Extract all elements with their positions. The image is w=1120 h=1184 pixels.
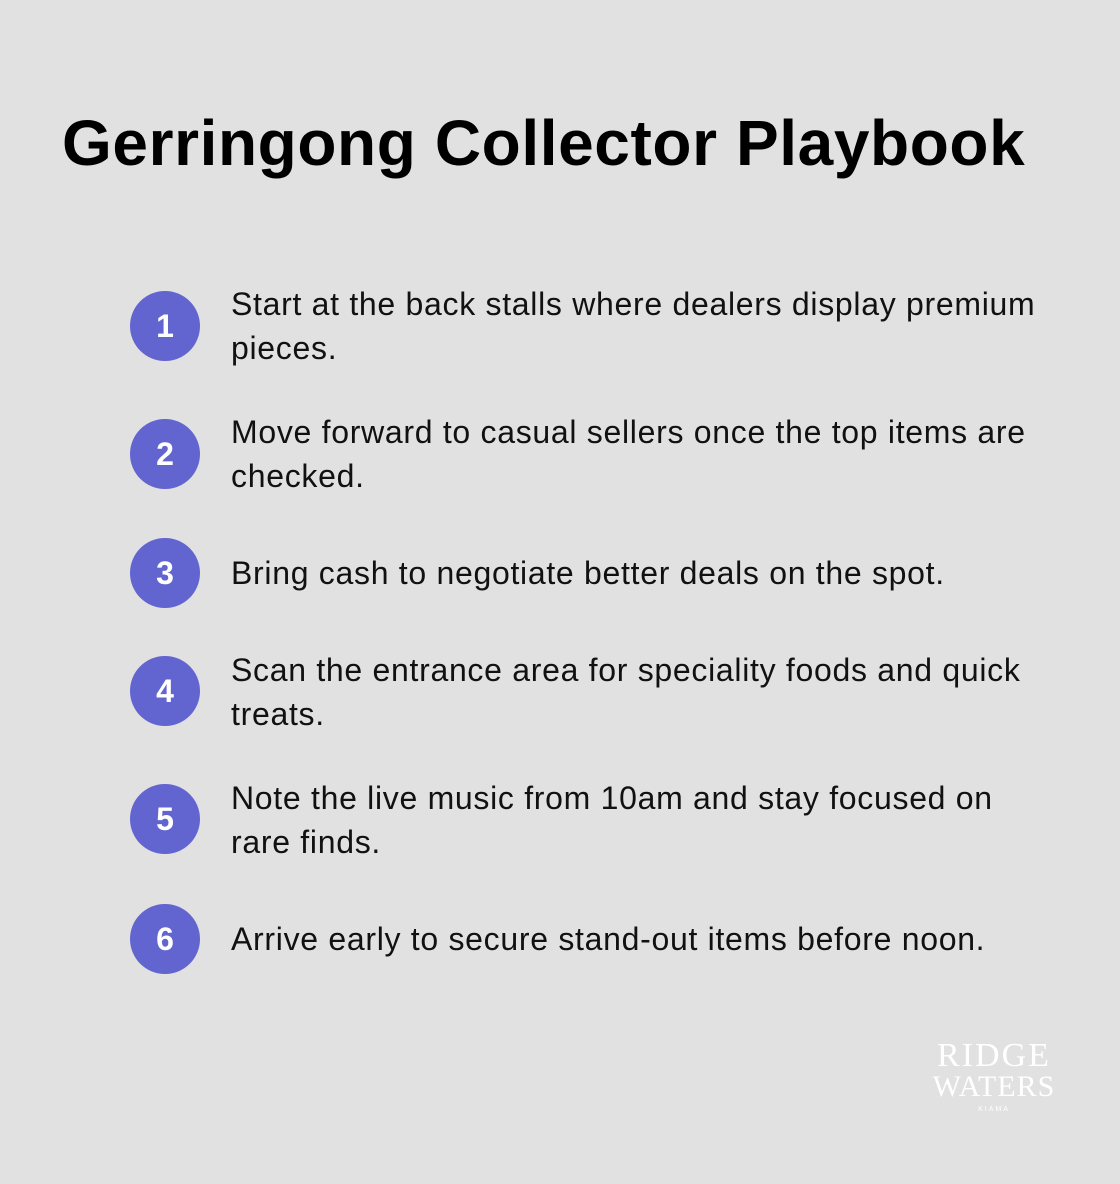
step 1: Start at the back stalls where dealers display premium pieces. — [231, 286, 1035, 366]
step 6: Arrive early to secure stand-out items before noon. — [231, 921, 985, 957]
badge 6 — [130, 904, 200, 974]
logo: KIAMA — [978, 1106, 1010, 1113]
badge 3 — [130, 538, 200, 608]
badge 1: 1 — [156, 308, 174, 344]
badge 6: 6 — [156, 921, 174, 957]
badge 5 — [130, 784, 200, 854]
badge 3: 3 — [156, 555, 174, 591]
badge 1 — [130, 291, 200, 361]
step 6 — [130, 904, 985, 974]
step 2: Move forward to casual sellers once the top items are checked. — [231, 414, 1026, 494]
badge 4: 4 — [156, 673, 174, 709]
step 5: Note the live music from 10am and stay focused on rare finds. — [231, 780, 993, 860]
title: Gerringong Collector Playbook — [62, 107, 1025, 179]
logo — [932, 1037, 1055, 1113]
step 3 — [130, 538, 945, 608]
badge 5: 5 — [156, 801, 174, 837]
step 4: Scan the entrance area for speciality foods and quick treats. — [231, 652, 1021, 732]
logo: WATERS — [933, 1070, 1055, 1103]
step 3: Bring cash to negotiate better deals on the spot. — [231, 555, 945, 591]
badge 2: 2 — [156, 436, 174, 472]
badge 2 — [130, 419, 200, 489]
badge 4 — [130, 656, 200, 726]
logo: RIDGE — [937, 1037, 1051, 1074]
